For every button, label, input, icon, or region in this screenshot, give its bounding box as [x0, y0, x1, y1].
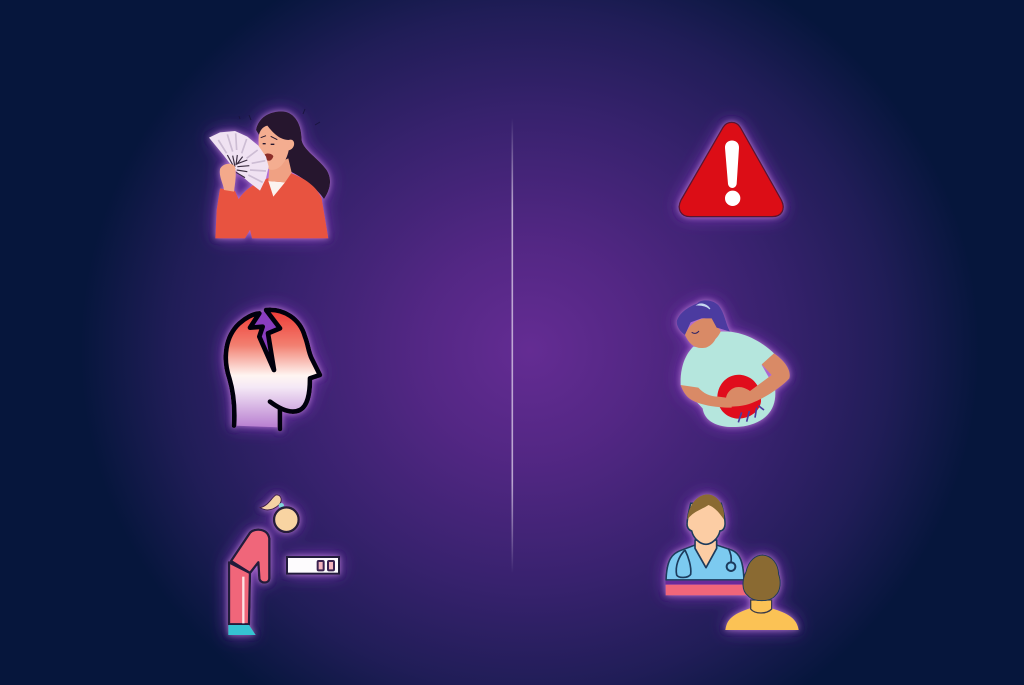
icon: woman fanning herself	[209, 109, 330, 238]
desk	[666, 585, 747, 595]
face	[259, 126, 294, 170]
exclamation dot	[725, 191, 740, 206]
fan	[209, 131, 269, 191]
face	[685, 318, 717, 348]
scale	[287, 557, 339, 574]
icon: woman bent over at a scale	[228, 495, 339, 635]
stethoscope	[676, 548, 731, 577]
patient	[725, 555, 799, 630]
doctor hair	[687, 494, 724, 520]
stomach pain circle	[717, 375, 761, 419]
center divider line	[512, 118, 513, 573]
head fill	[226, 310, 320, 427]
hair tie	[279, 503, 284, 508]
icon: red warning triangle	[679, 122, 783, 217]
patient hair	[743, 555, 780, 601]
shirt	[681, 331, 775, 427]
legs	[229, 562, 250, 624]
torso	[231, 530, 269, 583]
pain lines	[738, 406, 764, 422]
hand	[220, 164, 236, 192]
desk band	[665, 581, 744, 585]
doctor torso	[666, 545, 744, 580]
sweater	[215, 173, 328, 238]
triangle	[679, 122, 783, 217]
white shirt and neck	[268, 181, 285, 197]
shoe	[228, 625, 256, 635]
patient collar	[751, 600, 772, 613]
icon: head with lightning crack	[226, 310, 320, 429]
right arm	[726, 353, 790, 407]
lightning fill	[250, 310, 280, 370]
icon: person holding painful stomach	[677, 300, 790, 427]
doctor head	[687, 503, 725, 544]
head	[274, 507, 299, 532]
left arm	[681, 385, 732, 408]
head outline	[226, 310, 320, 429]
neck	[703, 318, 722, 347]
sweat marks	[239, 109, 320, 125]
ponytail	[260, 495, 281, 510]
hair back	[256, 111, 330, 199]
doctor neck	[695, 540, 717, 568]
patient body	[725, 608, 799, 630]
icon: doctor and patient	[665, 494, 799, 630]
doctor	[665, 494, 747, 595]
exclamation bar	[725, 140, 739, 188]
hair	[677, 300, 730, 335]
